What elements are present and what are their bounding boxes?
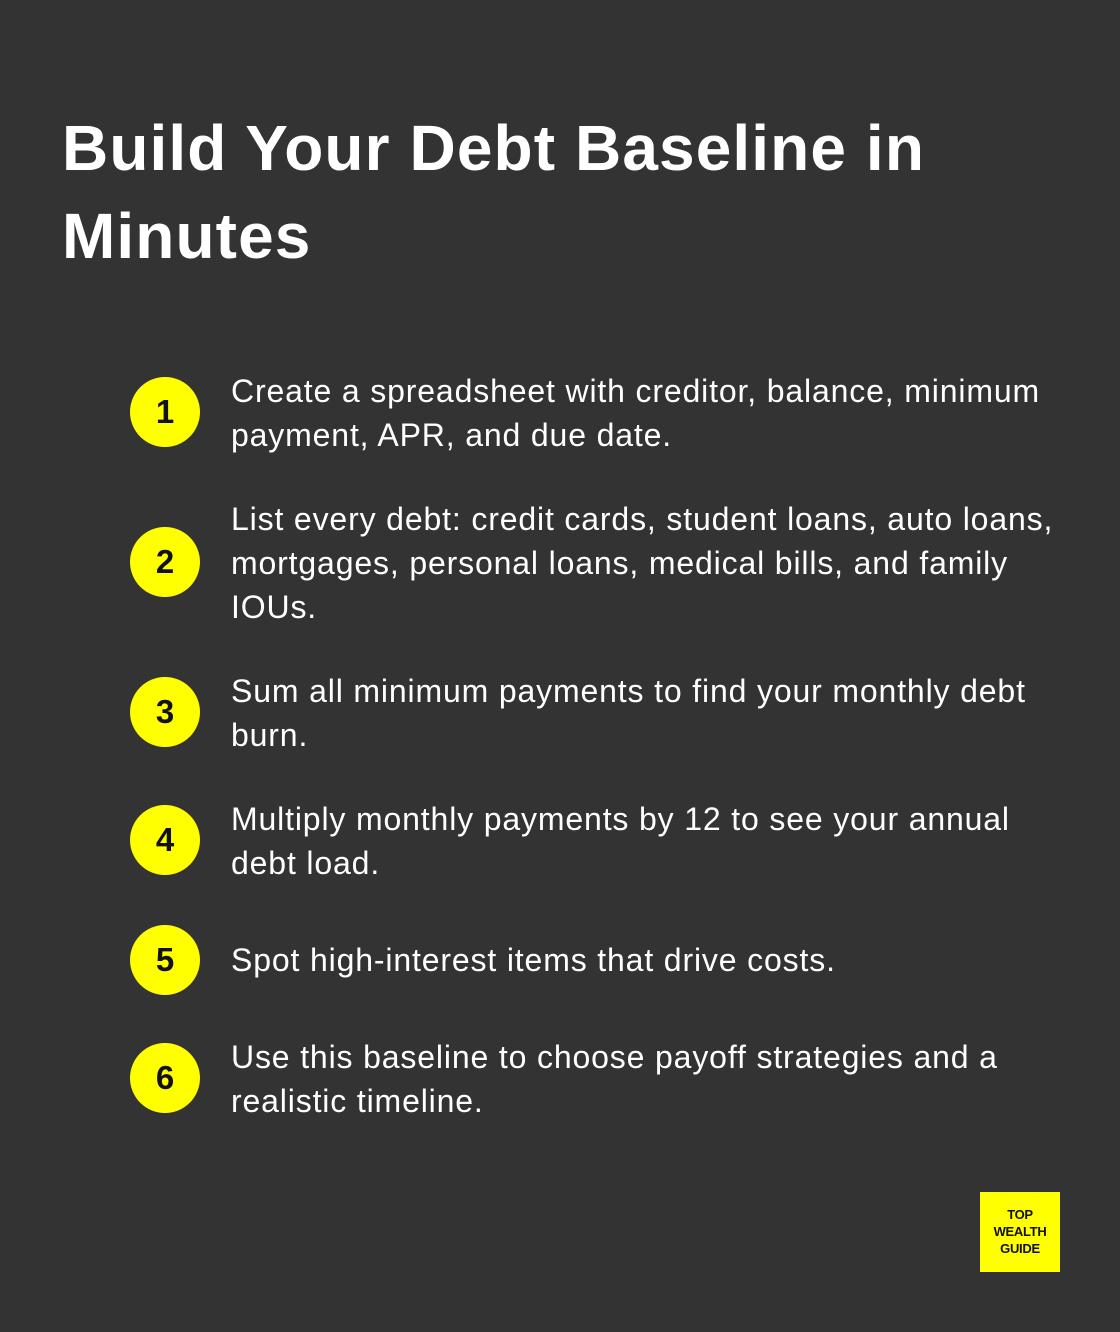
step 2 <box>130 501 1053 625</box>
step 5: Spot high-interest items that drive costs. <box>231 942 836 978</box>
step 3: burn. <box>231 717 308 753</box>
title: Minutes <box>62 200 311 272</box>
step 3: 3 <box>156 693 174 730</box>
step 3: Sum all minimum payments to find your monthly debt <box>231 673 1026 709</box>
step 6: realistic timeline. <box>231 1083 484 1119</box>
step 6: 6 <box>156 1059 174 1096</box>
step 1 <box>130 373 1040 453</box>
step 2: mortgages, personal loans, medical bills, and family <box>231 545 1008 581</box>
text: IOUs. <box>231 589 317 625</box>
step 1: payment, APR, and due date. <box>231 417 672 453</box>
step 6 <box>130 1039 998 1119</box>
logo: TOP <box>1007 1207 1033 1222</box>
logo: WEALTH <box>994 1224 1046 1239</box>
title <box>62 112 925 272</box>
step 4: Multiply monthly payments by 12 to see your annual <box>231 801 1010 837</box>
step 4: 4 <box>156 821 174 858</box>
step 4: debt load. <box>231 845 380 881</box>
step 4 <box>130 801 1010 881</box>
step 5: 5 <box>156 941 174 978</box>
logo: GUIDE <box>1000 1241 1040 1256</box>
step 5 <box>130 925 836 995</box>
step 1: 1 <box>156 393 174 430</box>
step 2: 2 <box>156 543 174 580</box>
logo <box>980 1192 1060 1272</box>
text: List every debt: credit cards, student loans, auto loans, <box>231 501 1053 537</box>
step 1: Create a spreadsheet with creditor, balance, minimum <box>231 373 1040 409</box>
title: Build Your Debt Baseline in <box>62 112 925 184</box>
step 6: Use this baseline to choose payoff strategies and a <box>231 1039 998 1075</box>
step 3 <box>130 673 1026 753</box>
